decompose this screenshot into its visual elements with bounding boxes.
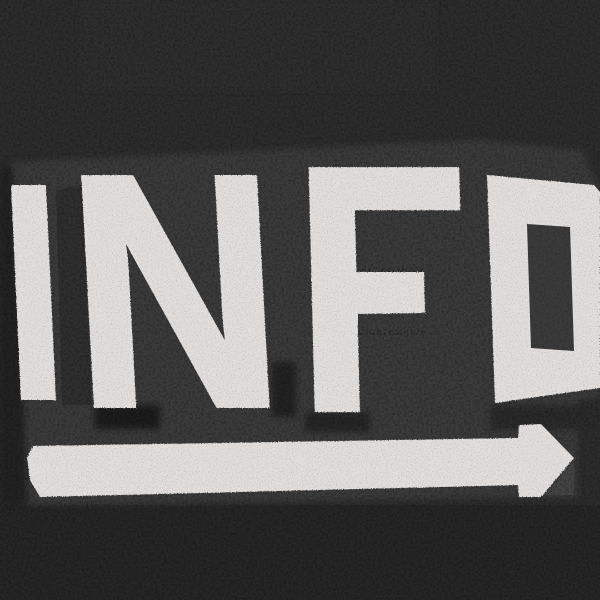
- letter N: N: [61, 107, 290, 475]
- painted word INFO: [0, 94, 600, 485]
- letter F: F: [289, 94, 476, 485]
- painted patch behind the lettering: [0, 140, 600, 505]
- letter O counter: [527, 224, 574, 351]
- F arm trim: [358, 268, 470, 335]
- arrow pointing right: [27, 424, 574, 497]
- letter O: O: [492, 145, 593, 436]
- F middle arm: [354, 272, 425, 314]
